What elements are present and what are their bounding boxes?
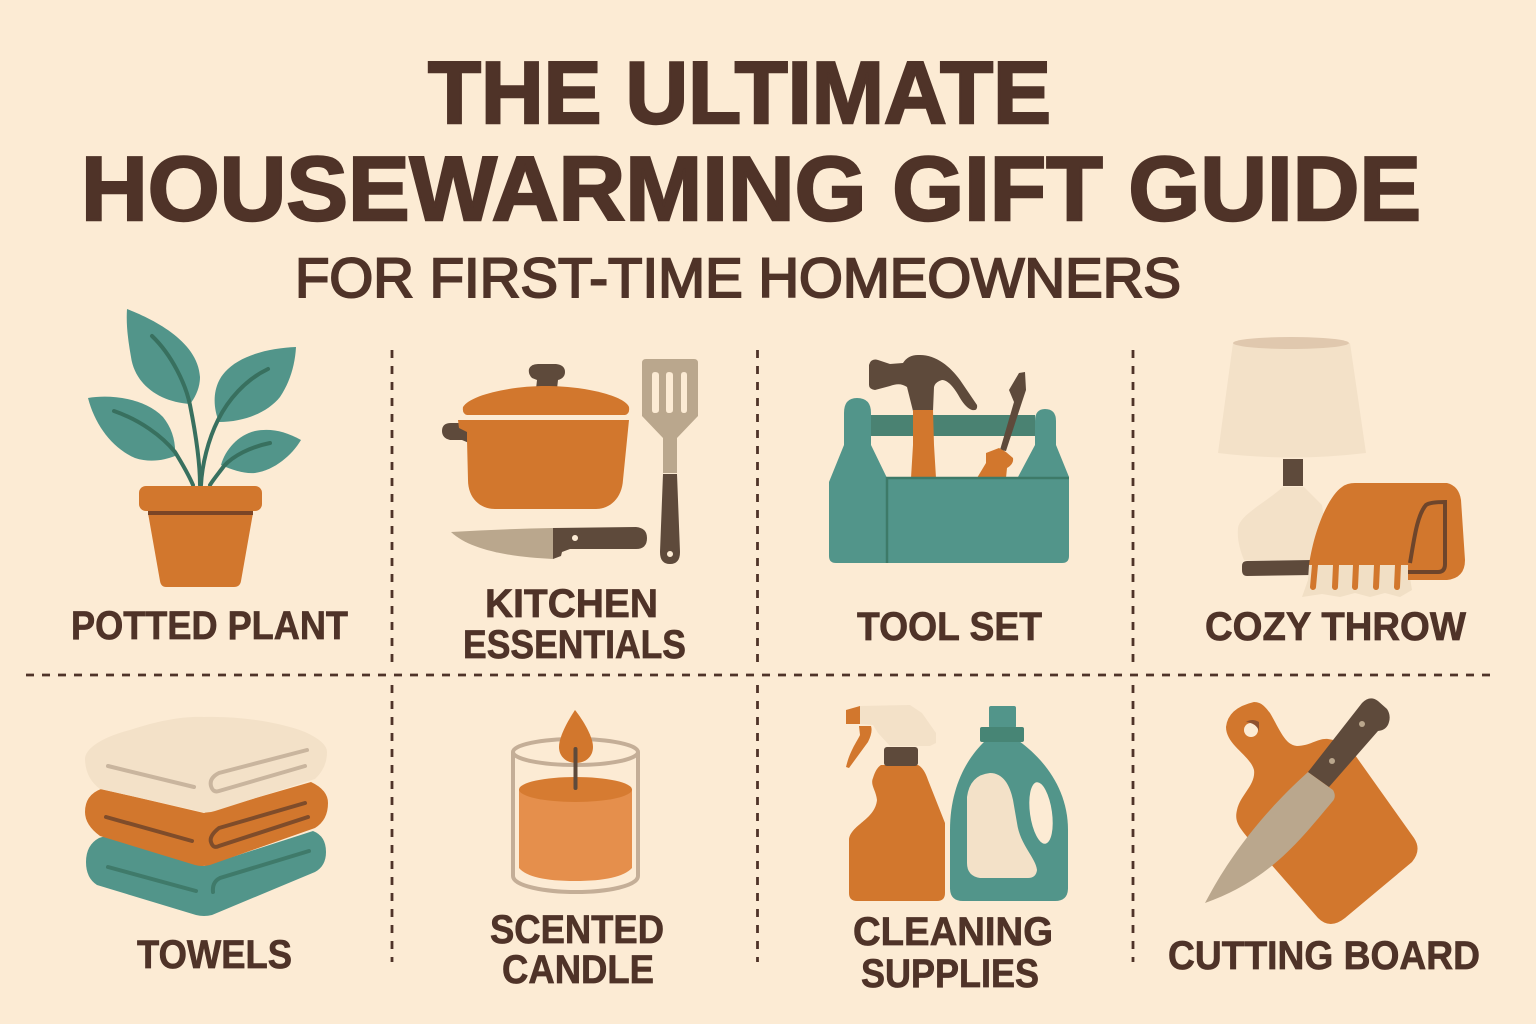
panel: scented candle <box>490 710 664 992</box>
label: TOWELS <box>137 933 292 977</box>
icon: potted plant <box>88 309 301 587</box>
label <box>463 582 686 667</box>
label: CANDLE <box>502 948 654 992</box>
panel: towels <box>85 717 328 977</box>
icon: board and knife <box>1205 698 1418 924</box>
label <box>490 908 664 992</box>
icon: tool box <box>829 355 1069 563</box>
label: COZY THROW <box>1205 605 1466 649</box>
label <box>853 910 1053 996</box>
label: CLEANING <box>853 910 1053 954</box>
label: SUPPLIES <box>861 952 1039 996</box>
panel: potted plant <box>71 309 348 648</box>
label: CUTTING BOARD <box>1168 934 1480 978</box>
icon: candle <box>513 710 638 892</box>
icon: lamp and throw <box>1218 337 1465 597</box>
title <box>81 43 1421 240</box>
icon: towel stack <box>85 717 328 916</box>
title: HOUSEWARMING GIFT GUIDE <box>81 139 1421 240</box>
panel: cutting board <box>1168 698 1480 978</box>
panel: cleaning supplies <box>846 705 1068 996</box>
icon: kitchen tools <box>442 359 698 564</box>
panel: kitchen essentials <box>442 359 698 667</box>
title: THE ULTIMATE <box>428 43 1051 142</box>
label: KITCHEN <box>485 582 658 626</box>
panel: tool set <box>829 355 1069 649</box>
subtitle: FOR FIRST-TIME HOMEOWNERS <box>295 246 1181 309</box>
panel: cozy throw <box>1205 337 1466 649</box>
label: SCENTED <box>490 908 664 952</box>
icon: spray and jug <box>846 705 1068 901</box>
label: TOOL SET <box>857 605 1042 649</box>
label: ESSENTIALS <box>463 623 686 667</box>
label: POTTED PLANT <box>71 604 348 648</box>
